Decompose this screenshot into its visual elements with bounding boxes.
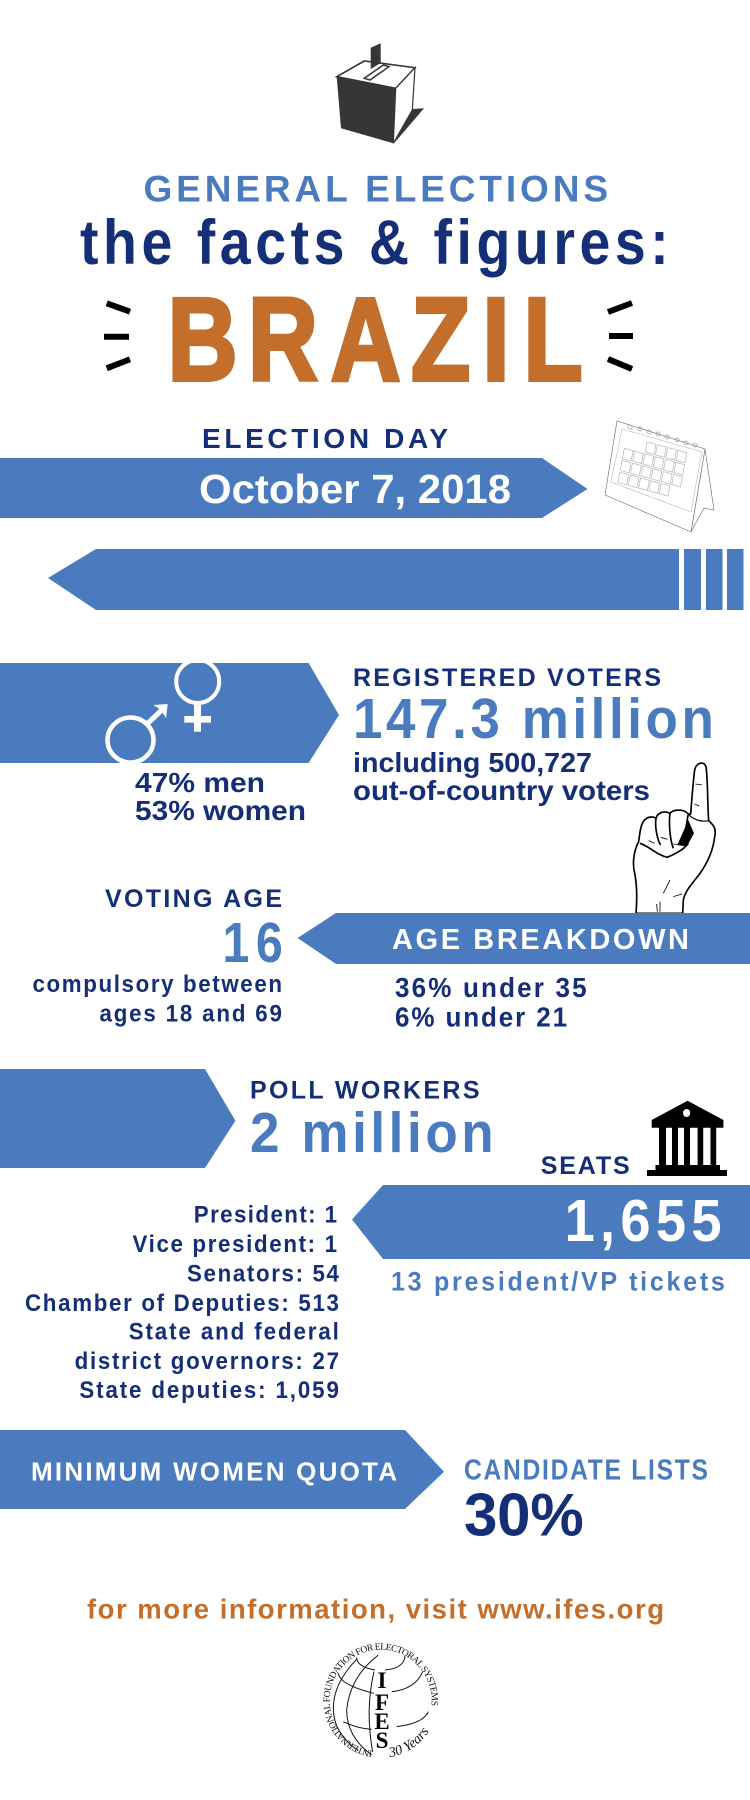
heading: the facts and figures: the facts & figures: xyxy=(80,207,669,278)
seats breakdown list: President: 1 xyxy=(194,1201,337,1228)
seats breakdown list: Senators: 54 xyxy=(187,1260,339,1287)
heading: Brazil: BRAZIL xyxy=(168,273,583,405)
banner arrow: seats total: 1,655 xyxy=(565,1189,722,1255)
registered voters block: out-of-country voters xyxy=(353,775,650,806)
logo: IFES: E xyxy=(374,1709,390,1734)
candidate lists quota xyxy=(464,1454,708,1549)
seats label: SEATS xyxy=(541,1152,630,1180)
poll workers text: POLL WORKERS xyxy=(250,1076,480,1104)
gender share text: 47% men xyxy=(135,767,265,798)
heading: general elections: GENERAL ELECTIONS xyxy=(144,168,608,210)
age breakdown figures: 36% under 35 xyxy=(395,972,587,1003)
icon: desk calendar xyxy=(605,421,714,532)
banner arrow: minimum women quota: MINIMUM WOMEN QUOTA xyxy=(31,1456,397,1486)
poll workers text: 2 million xyxy=(250,1100,494,1164)
banner arrow: minimum women quota xyxy=(0,1430,444,1509)
voting age block xyxy=(32,885,283,1027)
seats breakdown list: district governors: 27 xyxy=(75,1347,339,1374)
icon: ballot box xyxy=(337,43,424,143)
banner arrow: age breakdown: AGE BREAKDOWN xyxy=(392,924,689,956)
icon: right emphasis ticks xyxy=(608,303,633,369)
voting age block: ages 18 and 69 xyxy=(100,1000,282,1027)
voting age block: 16 xyxy=(222,911,283,975)
footer: more information: for more information, visit www.ifes.org xyxy=(87,1594,664,1625)
seats breakdown list: Chamber of Deputies: 513 xyxy=(25,1289,339,1316)
logo: IFES: INTERNATIONAL FOUNDATION FOR ELECTORAL SYSTEMS xyxy=(323,1643,438,1757)
candidate lists quota: 30% xyxy=(464,1482,584,1549)
seats breakdown list: Vice president: 1 xyxy=(132,1230,337,1257)
seats breakdown list xyxy=(25,1201,339,1403)
candidate lists quota: CANDIDATE LISTS xyxy=(464,1454,708,1486)
logo: IFES: S xyxy=(376,1728,388,1753)
registered voters block: 147.3 million xyxy=(353,686,714,750)
banner arrow: age breakdown xyxy=(298,913,750,964)
icon: female symbol xyxy=(176,660,219,732)
age breakdown figures: 6% under 21 xyxy=(395,1002,567,1033)
logo: IFES: I xyxy=(378,1668,387,1693)
date text: October 7, 2018 xyxy=(199,466,511,512)
registered voters block: REGISTERED VOTERS xyxy=(353,664,661,692)
banner arrow: poll workers xyxy=(0,1069,235,1168)
icon: government building xyxy=(647,1101,727,1176)
election day label: ELECTION DAY xyxy=(202,423,448,454)
banner arrow: election date xyxy=(0,458,588,518)
seats breakdown list: State deputies: 1,059 xyxy=(79,1376,339,1403)
logo: IFES: F xyxy=(375,1690,389,1715)
seats breakdown list: State and federal xyxy=(129,1318,339,1345)
voting age block: compulsory between xyxy=(32,970,282,997)
registered voters block xyxy=(353,664,714,806)
gender share text xyxy=(135,767,306,826)
age breakdown figures xyxy=(395,972,587,1033)
gender share text: 53% women xyxy=(135,795,306,826)
logo: IFES: 30 Years xyxy=(390,1728,428,1757)
icon: left emphasis ticks xyxy=(104,303,130,368)
icon: male symbol xyxy=(108,704,168,762)
banner arrow: gender panel xyxy=(0,663,339,763)
tickets note: 13 president/VP tickets xyxy=(391,1266,725,1297)
voting age block: VOTING AGE xyxy=(105,885,282,913)
icon: raised index finger hand xyxy=(633,763,715,913)
registered voters block: including 500,727 xyxy=(353,747,592,778)
banner arrow: seats total xyxy=(352,1185,750,1259)
banner arrow: empty left-pointing with stripes xyxy=(48,549,744,610)
